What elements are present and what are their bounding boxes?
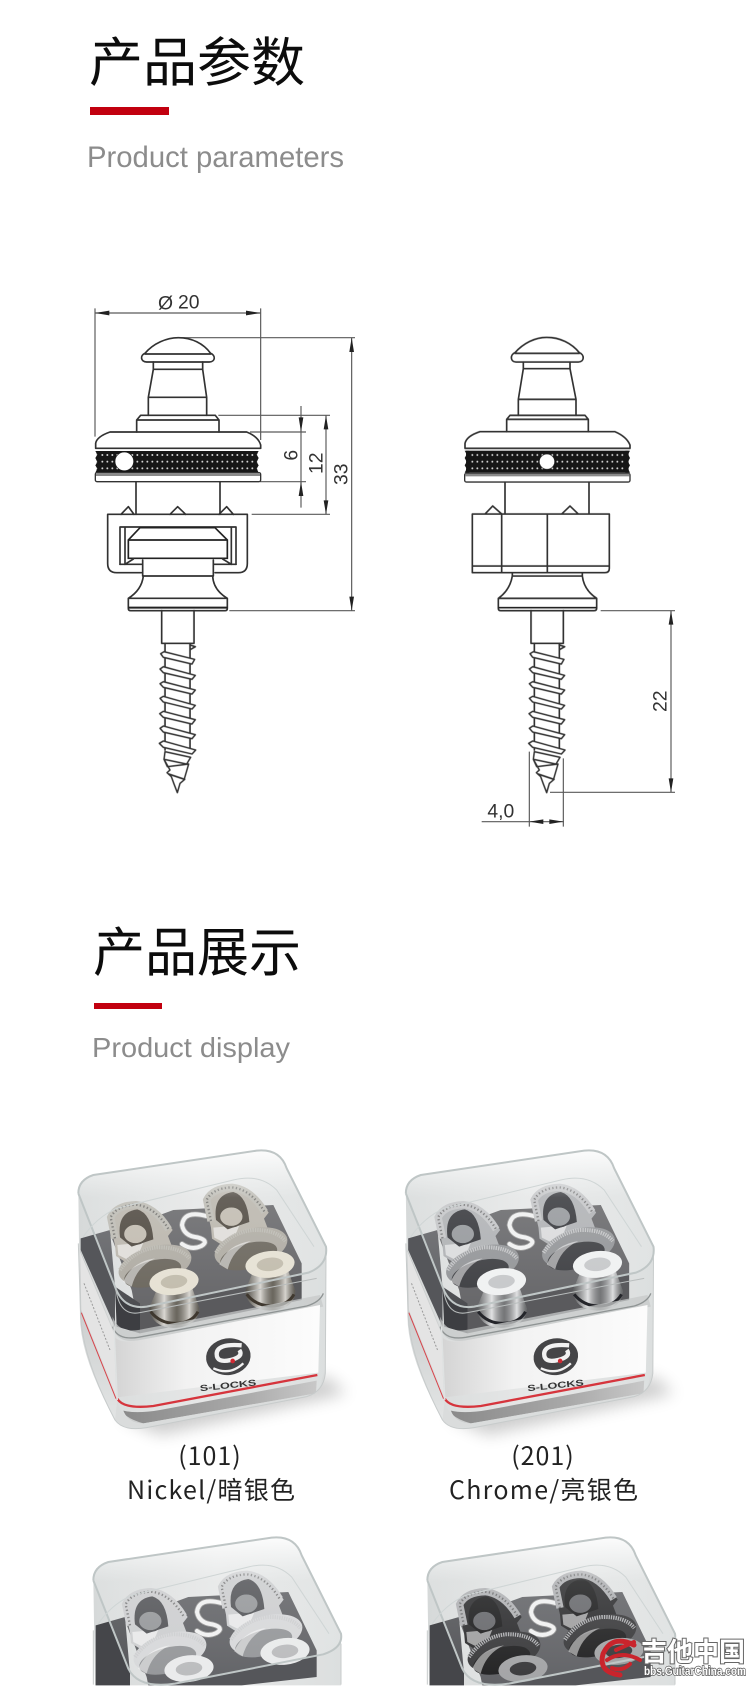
product box: satin silver, cropped — [93, 1537, 341, 1685]
technical drawing: front view with dimensions — [95, 293, 355, 793]
dimension: diameter 20: Ø — [158, 293, 173, 314]
dimension: diameter 20 — [95, 293, 261, 440]
dimension: height 6: 6 — [282, 450, 303, 461]
dimension: length 22 — [550, 611, 675, 792]
product box 101: nickel — [78, 1150, 347, 1435]
dimensions: screw length 22 and width 4,0 — [482, 611, 675, 827]
dimension: height 12: 12 — [306, 452, 327, 474]
icon: red G mark — [602, 1641, 640, 1675]
caption: 101 code: (101) — [178, 1437, 242, 1473]
dimension: length 22: 22 — [651, 690, 672, 712]
subheading: Product display: Product display — [92, 1032, 290, 1063]
product box: black, cropped — [427, 1537, 675, 1685]
box label text: S-LOCKS — [527, 1377, 585, 1393]
watermark title: 吉他中国 — [641, 1637, 745, 1667]
accent bar — [90, 107, 169, 115]
caption: 201 code: (201) — [511, 1437, 575, 1473]
wood screw — [159, 611, 196, 793]
dimension: width 4,0: 4,0 — [487, 801, 514, 822]
heading: 产品参数: 产品参数 — [89, 34, 305, 93]
dimension: height 33: 33 — [331, 463, 352, 485]
strap button and nut outline — [465, 337, 630, 611]
wood screw — [529, 611, 565, 793]
technical drawing: side view with dimensions — [465, 337, 630, 793]
watermark: GuitarChina logo and text — [602, 1637, 746, 1678]
dimension: width 4,0 — [482, 752, 564, 827]
product box 201: chrome — [406, 1150, 674, 1435]
heading: 产品展示: 产品展示 — [93, 924, 301, 983]
dimension: height 6 — [250, 406, 306, 508]
dimension: diameter 20: 20 — [178, 293, 199, 314]
strap button and lock outline — [95, 338, 261, 611]
subheading: Product parameters: Product parameters — [87, 141, 344, 174]
accent bar — [94, 1003, 162, 1009]
caption: Nickel colour: Nickel/暗银色 — [127, 1471, 295, 1507]
caption: Chrome colour: Chrome/亮银色 — [449, 1471, 638, 1507]
dimension: height 12 — [218, 415, 330, 514]
dimension: height 33 — [180, 338, 355, 611]
box label text: S-LOCKS — [199, 1377, 257, 1393]
